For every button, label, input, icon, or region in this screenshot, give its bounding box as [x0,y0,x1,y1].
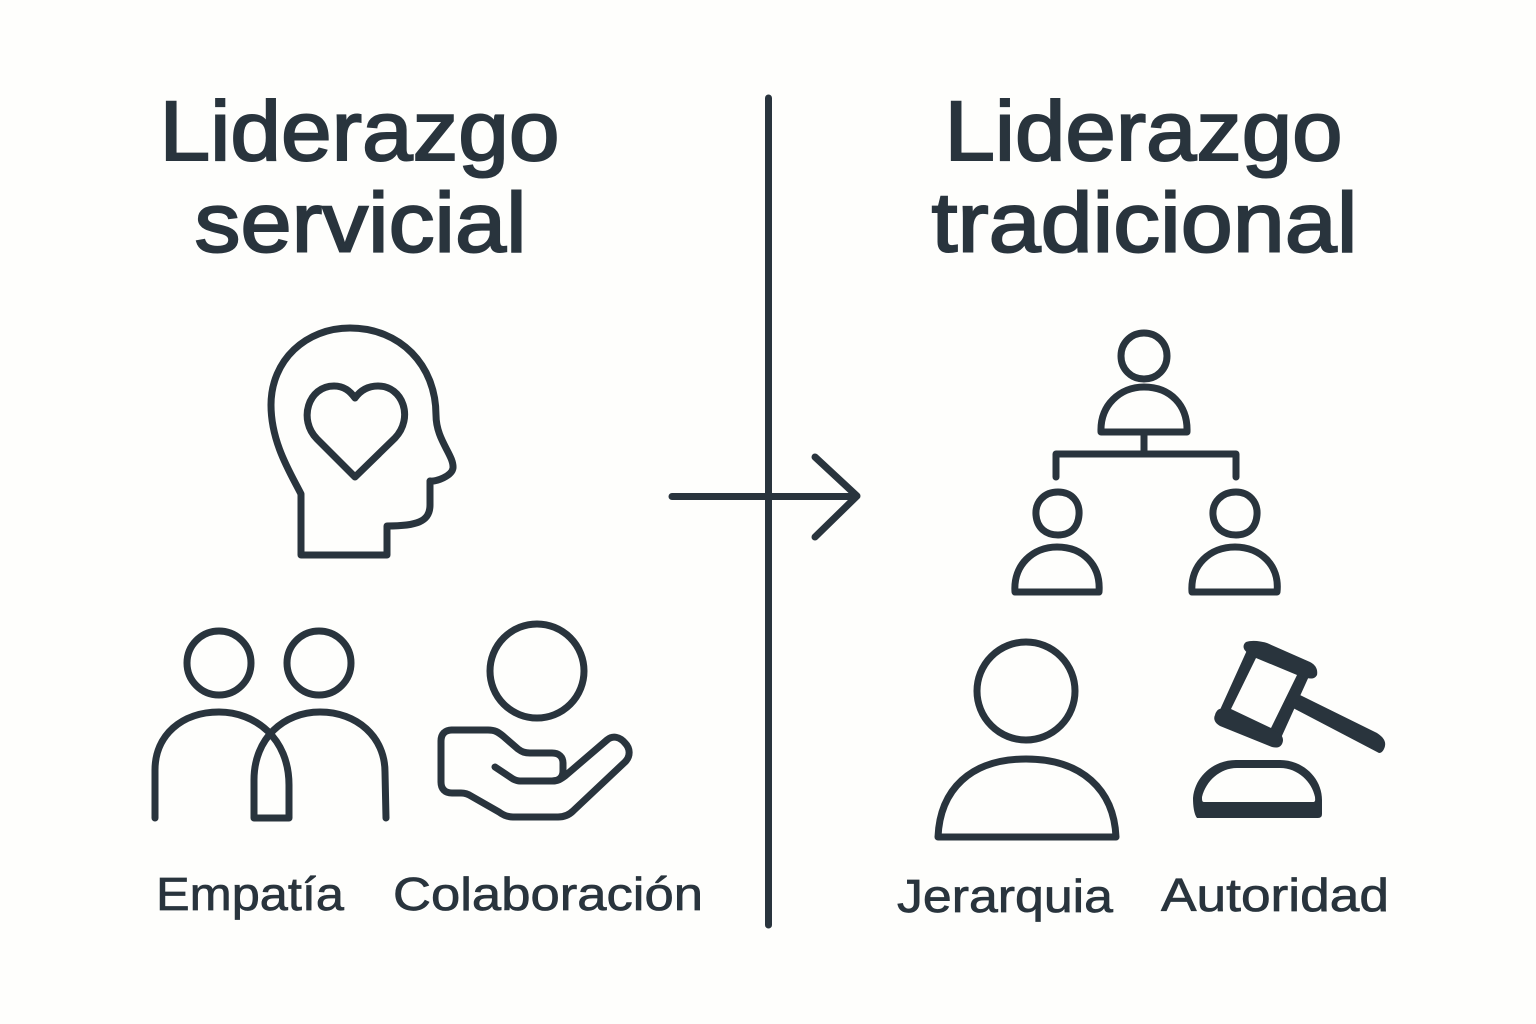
label: Colaboración: Colaboración [393,868,703,920]
vertical divider [765,98,772,925]
heading: Liderazgo servicial: servicial [194,176,526,270]
icon: head with heart [271,328,453,555]
heading: Liderazgo tradicional: Liderazgo [944,84,1342,178]
label: Empatía: Empatía [156,868,344,920]
heading: Liderazgo tradicional: tradicional [932,176,1358,270]
icon: org chart hierarchy [1015,333,1277,592]
icon: single person [938,642,1116,837]
arrow [672,457,857,537]
heading: Liderazgo servicial: Liderazgo [160,84,560,178]
heading: Liderazgo tradicional [932,84,1358,270]
icon: hand holding person [441,624,629,817]
gavel head frame [1219,648,1310,738]
label: Jerarquia: Jerarquia [897,870,1113,922]
gavel top bar [1244,641,1317,679]
gavel bottom bar [1214,709,1283,748]
label: Autoridad: Autoridad [1161,869,1389,921]
icon: two people [155,631,386,818]
sounding block [1193,760,1322,818]
gavel handle [1293,695,1385,753]
heading: Liderazgo servicial [160,84,560,270]
icon: gavel [1193,641,1385,818]
